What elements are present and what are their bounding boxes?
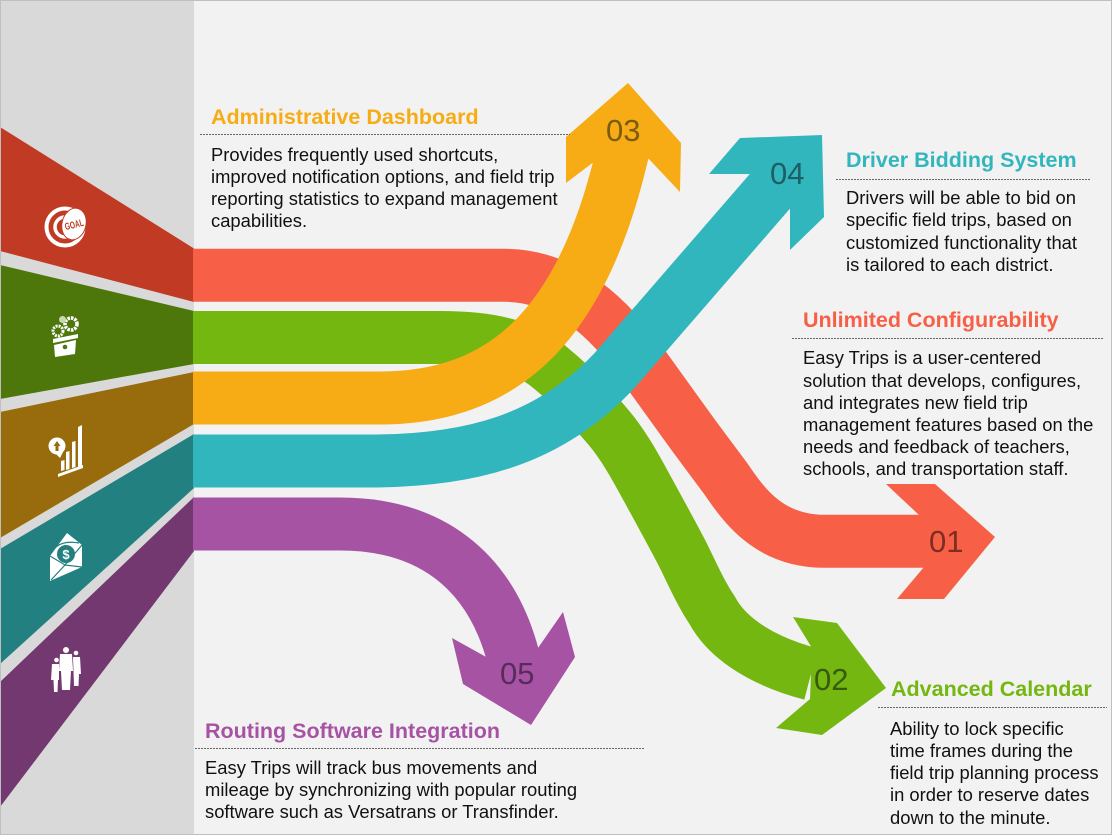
arrow 02: green: 02	[814, 662, 848, 697]
wedge: red	[0, 127, 194, 302]
text block: Driver Bidding System	[836, 148, 1090, 275]
text block: Unlimited Configurability: Unlimited Configurability	[803, 308, 1059, 332]
text block: Advanced Calendar: field trip planning process	[890, 762, 1099, 783]
text block: Administrative Dashboard	[200, 105, 570, 231]
arrow 05: purple: 05	[500, 656, 534, 691]
text block: Advanced Calendar: time frames during the	[890, 740, 1073, 761]
icon: goal target: GOAL	[64, 218, 85, 233]
text block: Routing Software Integration: Routing Software Integration	[205, 719, 500, 743]
arrow 02: green	[193, 338, 886, 735]
icon: growth chart	[48, 425, 83, 477]
text block: Driver Bidding System: Drivers will be able to bid on	[846, 187, 1076, 208]
text block: Unlimited Configurability: and integrates new field trip	[803, 392, 1028, 413]
wedge: teal	[0, 434, 194, 664]
arrow 04: teal: 04	[770, 156, 804, 191]
text block: Administrative Dashboard: reporting statistics to expand management	[211, 188, 558, 209]
text block: Routing Software Integration	[195, 719, 645, 822]
arrow 03: orange: 03	[606, 113, 640, 148]
text block: Driver Bidding System: specific field trips, based on	[846, 209, 1072, 230]
text block: Unlimited Configurability: Easy Trips is a user-centered	[803, 347, 1041, 368]
text block: Routing Software Integration: mileage by synchronizing with popular routing	[205, 779, 577, 800]
arrow 05: purple	[193, 524, 575, 725]
arrow 01: red	[193, 275, 995, 599]
text block: Unlimited Configurability: solution that develops, configures,	[803, 370, 1081, 391]
arrow 03: orange	[193, 83, 681, 398]
arrow 01: red: 01	[929, 524, 963, 559]
left grey panel	[0, 0, 194, 835]
text block: Unlimited Configurability	[792, 308, 1103, 479]
wedge: green	[0, 265, 194, 399]
wedge: brown	[0, 372, 194, 538]
text block: Advanced Calendar	[878, 677, 1107, 828]
text block: Administrative Dashboard: capabilities.	[211, 210, 307, 231]
text block: Advanced Calendar: Ability to lock specific	[890, 718, 1064, 739]
text block: Unlimited Configurability: management features based on the	[803, 414, 1093, 435]
text block: Routing Software Integration: Easy Trips will track bus movements and	[205, 757, 537, 778]
panel: coloured wedges	[0, 127, 194, 807]
text block: Advanced Calendar: Advanced Calendar	[891, 677, 1092, 701]
icon: gears and laptop	[53, 316, 78, 357]
text block: Unlimited Configurability: schools, and transportation staff.	[803, 458, 1068, 479]
text block: Administrative Dashboard: Administrative Dashboard	[211, 105, 479, 129]
text block: Unlimited Configurability: needs and feedback of teachers,	[803, 436, 1070, 457]
text block: Advanced Calendar: down to the minute.	[890, 807, 1051, 828]
text block: Administrative Dashboard: Provides frequently used shortcuts,	[211, 144, 498, 165]
arrow 04: teal	[193, 135, 824, 461]
icon: goal target	[46, 206, 90, 246]
text block: Driver Bidding System: is tailored to each district.	[846, 254, 1054, 275]
text block: Routing Software Integration: software such as Versatrans or Transfinder.	[205, 801, 559, 822]
icon: envelope with dollar	[50, 533, 82, 581]
text block: Advanced Calendar: in order to reserve dates	[890, 784, 1089, 805]
text block: Driver Bidding System: Driver Bidding System	[846, 148, 1077, 172]
text block: Administrative Dashboard: improved notification options, and field trip	[211, 166, 554, 187]
icon: people	[51, 647, 81, 692]
text block: Driver Bidding System: customized functionality that	[846, 232, 1077, 253]
icon: envelope with dollar: $	[62, 547, 70, 562]
wedge: purple	[0, 497, 194, 807]
